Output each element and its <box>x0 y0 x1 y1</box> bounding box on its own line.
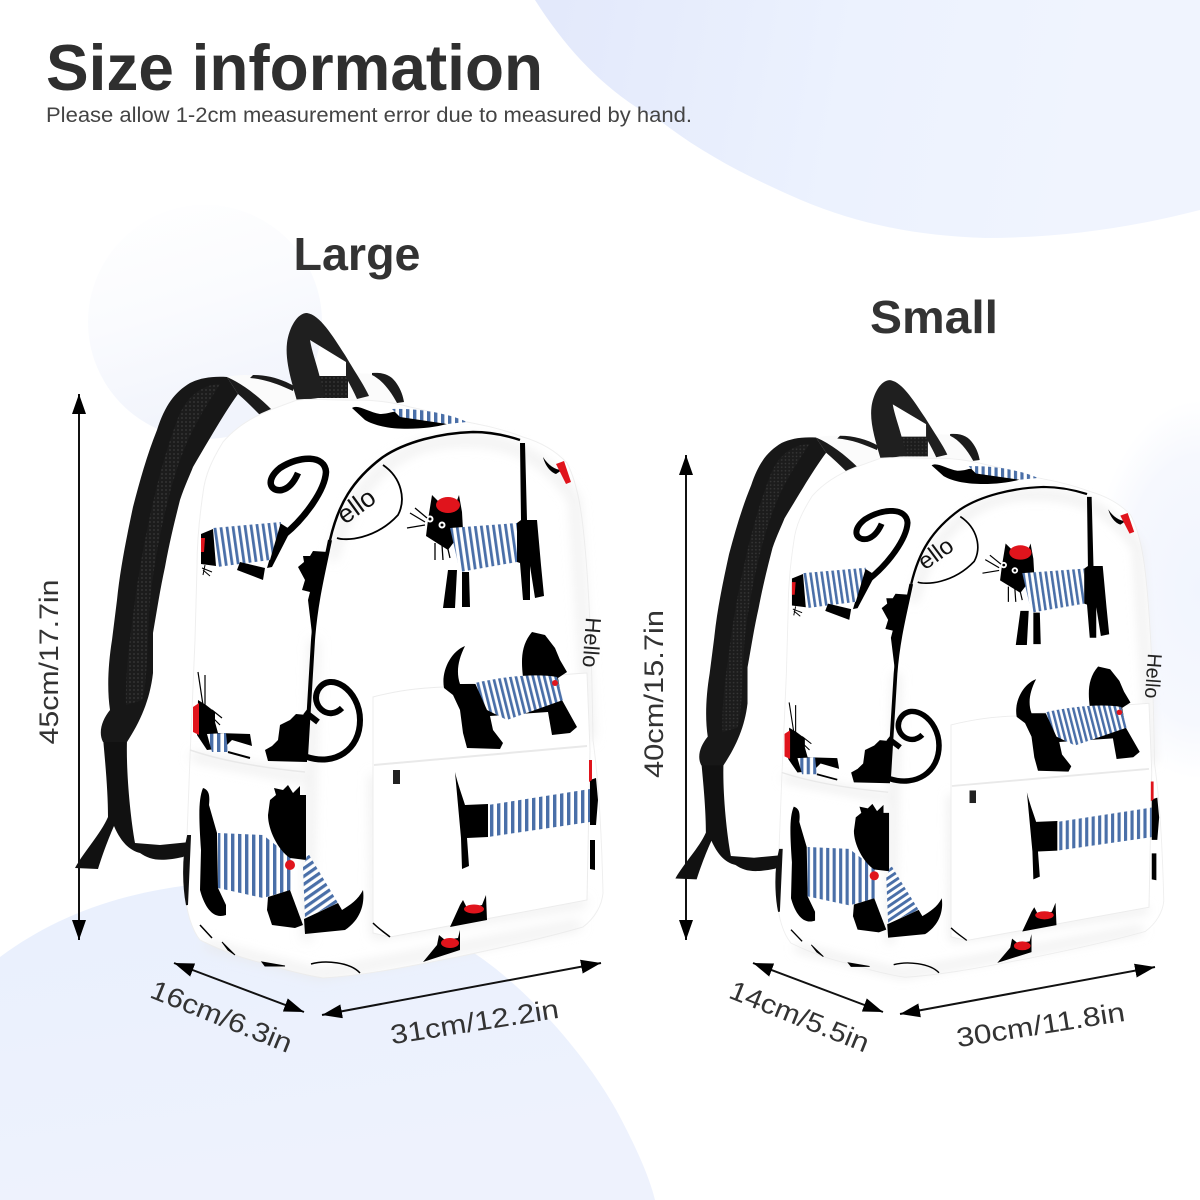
dimensions: small <box>639 455 1155 1058</box>
height label small: 40cm/15.7in <box>639 610 669 778</box>
backpack: small: ello <box>913 533 959 575</box>
backpack: small: Hello <box>1140 653 1165 699</box>
depth arrow small <box>753 963 883 1012</box>
title: Size information <box>46 31 543 104</box>
backpack: large: ello <box>331 482 381 530</box>
width label large: 31cm/12.2in <box>388 994 561 1050</box>
subtitle: Please allow 1-2cm measurement error due to measured by hand. <box>46 104 692 127</box>
heading: Small: Small <box>870 291 998 343</box>
heading: Large: Large <box>294 228 420 280</box>
width arrow small <box>900 967 1155 1014</box>
backpack: small <box>675 380 1165 977</box>
width arrow large <box>322 963 601 1015</box>
height arrow large <box>78 394 80 940</box>
backpack: large: Hello <box>578 617 606 668</box>
height label large: 45cm/17.7in <box>34 580 64 744</box>
backpack: large <box>75 313 606 978</box>
width label small: 30cm/11.8in <box>954 997 1127 1053</box>
depth label large: 16cm/6.3in <box>146 975 297 1059</box>
dimensions: large <box>34 394 601 1059</box>
depth label small: 14cm/5.5in <box>725 975 874 1058</box>
height arrow small <box>685 455 687 940</box>
depth arrow large <box>174 963 304 1012</box>
